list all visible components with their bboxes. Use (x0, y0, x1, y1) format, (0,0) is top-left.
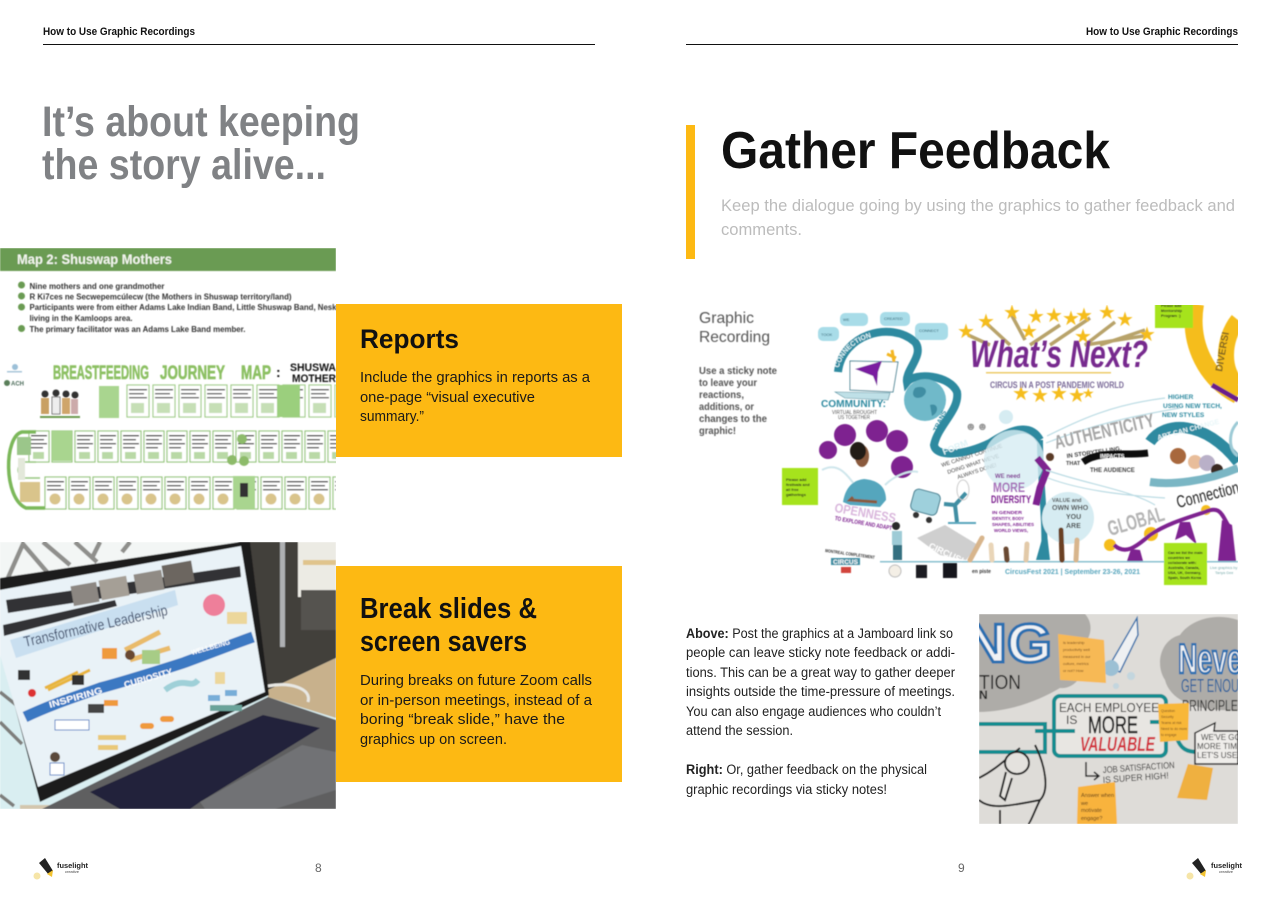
what's next title with stars: CIRCUS IN A POST PANDEMIC WORLD (990, 380, 1124, 390)
left page number: 8 (315, 861, 322, 875)
green sticky note bottom: collaborate with: (1168, 561, 1197, 565)
more diversity text: MORE (993, 479, 1025, 495)
lettering on wall (979, 622, 1238, 712)
green sticky note bottom (1164, 543, 1207, 585)
sketched man (979, 745, 1045, 824)
credit text: Tanya Gee (1215, 571, 1233, 575)
break slides body (360, 672, 593, 748)
authenticity section: NEW STYLES (1162, 412, 1205, 419)
laptop screen drawing: Transformative Leadership (22, 602, 169, 651)
what's next title with stars: ★ (977, 311, 995, 333)
reports body: summary.” (360, 408, 424, 425)
map bullet list: Nine mothers and one grandmother (30, 281, 165, 291)
what's next title with stars: ★ (1116, 309, 1134, 331)
lettering on wall: PRINCIPLE (1182, 698, 1238, 715)
map title: BREASTFEEDING (53, 363, 149, 384)
authenticity section (1046, 394, 1222, 505)
teal box: each employee: IS (1066, 713, 1077, 727)
global connection figures (1104, 478, 1241, 561)
green sticky note bottom: Can we list the main (1168, 551, 1203, 555)
transform ribbon and aerialist: FORM (941, 438, 969, 457)
authenticity section: HIGHER (1168, 394, 1194, 401)
map group of mothers (40, 390, 80, 418)
break slides body: or in-person meetings, instead of a (360, 692, 593, 709)
image: breastfeeding journey map report page (0, 248, 338, 511)
job satisfaction note (1086, 760, 1175, 785)
right footer logo (1186, 858, 1242, 880)
orange sticky notes: Is leadership (1063, 641, 1085, 645)
global connection figures: Connection (1174, 478, 1241, 512)
lettering on wall: GET ENOU (1181, 676, 1239, 696)
orange sticky notes: productivity well (1063, 648, 1090, 652)
left footer logo (34, 858, 88, 880)
speech bubble (1195, 723, 1247, 764)
credit text (1210, 566, 1238, 575)
map journey rows (9, 384, 338, 511)
jamboard instructions: reactions, (699, 389, 744, 401)
connection ribbon and laptop: WE (843, 317, 850, 322)
transform ribbon and aerialist: ☻☻ (965, 421, 988, 433)
what's next title with stars: ★ (1068, 385, 1086, 407)
map header bar: Map 2: Shuswap Mothers (17, 251, 172, 267)
sun arc: diversity: DIVERSI (1214, 331, 1232, 373)
circus fest logos: MONTREAL COMPLETEMENT (825, 548, 875, 560)
green sticky note bottom: countries we (1168, 556, 1190, 560)
what's next title with stars: ★ (957, 321, 975, 343)
authenticity section: USING NEW TECH, (1163, 403, 1222, 410)
right page subtitle: comments. (721, 220, 802, 239)
map bullet list (18, 281, 337, 334)
audience crowd on teal arch (1150, 419, 1238, 483)
break slides body: boring “break slide,” have the (360, 711, 565, 728)
what's next title with stars: ★ (1045, 305, 1063, 327)
laptop screen drawing: WELLBEING (191, 639, 232, 657)
map title: MOTHER (292, 373, 336, 385)
community text (821, 399, 886, 421)
map logos (4, 364, 24, 388)
what's next title with stars: ★ (1031, 385, 1049, 407)
right page number: 9 (958, 861, 965, 875)
be who you are circle: OWN WHO (1052, 505, 1089, 512)
be who you are circle: VALUE and (1052, 498, 1082, 504)
teal box: each employee (979, 696, 1198, 756)
right page text: above and right captions: Above: Post the graphics at a Jamboard link so (686, 626, 953, 641)
man looking up (822, 442, 918, 507)
connection ribbon and laptop (818, 312, 1044, 458)
global connection figures: GLOBAL (1105, 503, 1167, 541)
be who you are circle (1042, 492, 1094, 544)
laptop screen drawing: CURIOSITY (123, 667, 174, 690)
teal box: each employee: VALUABLE (1080, 734, 1155, 756)
what's next title with stars: ★ (1003, 302, 1021, 324)
connection ribbon and laptop: TOOK (821, 332, 833, 337)
what's next title with stars: ★ (1098, 302, 1116, 324)
right page subtitle (721, 196, 1235, 239)
green sticky note left: all free (786, 487, 799, 492)
teal box: each employee: EACH EMPLOYEE (1059, 700, 1159, 715)
what's next title with stars: ★ (1082, 385, 1095, 401)
what's next title with stars: ★ (1020, 321, 1038, 343)
orange sticky notes: culture, metrics (1063, 662, 1089, 666)
right running header: How to Use Graphic Recordings (1086, 26, 1238, 38)
reports heading: Reports (360, 324, 459, 354)
lettering on wall: NG (965, 612, 1052, 674)
what's next title with stars: ★ (1027, 306, 1045, 328)
transform ribbon and aerialist (932, 409, 1054, 560)
globe (904, 379, 946, 421)
laptop screen bezel (0, 542, 269, 802)
reports body: one-page “visual executive (360, 389, 535, 406)
break slides body: graphics up on screen. (360, 731, 507, 748)
what's next title with stars: ★ (1012, 383, 1030, 405)
map title: JOURNEY (160, 363, 225, 384)
right page text: above and right captions: Right: Or, gather feedback on the physical (686, 762, 927, 777)
green sticky note bottom: Australia, Canada, (1168, 566, 1199, 570)
orange sticky notes: Security (1161, 715, 1174, 719)
connection ribbon and laptop: CREATED (884, 316, 903, 321)
rocket (1103, 618, 1138, 689)
left footer logo: fuselight (57, 861, 88, 870)
transform ribbon and aerialist: DOING WHAT WE'VE (947, 453, 1000, 476)
van, dancer and street scene (880, 480, 1238, 566)
more diversity text: SHAPES, ABILITIES (992, 522, 1034, 527)
right page text: above and right captions (686, 626, 955, 797)
right page text: above and right captions: attend the session. (686, 723, 793, 738)
jamboard instructions: graphic! (699, 425, 736, 437)
what's next title with stars: What’s Next? (970, 334, 1148, 376)
speech bubble: MORE TIME (1197, 742, 1242, 751)
orange sticky notes: Question (1161, 709, 1175, 713)
be who you are circle: ARE (1066, 523, 1081, 530)
right page text: above and right captions: insights outside the time-pressure of meetings. (686, 684, 955, 699)
green sticky note left: Please add (786, 477, 807, 482)
green sticky note top: Mentorship (1161, 308, 1183, 313)
right footer logo: creative (1219, 869, 1234, 874)
laptop base and keyboard (42, 697, 336, 809)
green sticky note top: Please add (1161, 303, 1182, 308)
map title: : (276, 364, 281, 380)
right page text: above and right captions: graphic recordings via sticky notes! (686, 782, 887, 797)
circus fest logos: en piste (972, 569, 991, 575)
authenticity section: THAT (1066, 461, 1081, 467)
map title: SHUSWA (290, 362, 336, 374)
orange sticky notes: engage? (1081, 816, 1102, 822)
circus fest logos (825, 548, 991, 578)
more diversity text: WE need (995, 474, 1021, 480)
orange sticky notes: Teams at risk (1161, 721, 1182, 725)
break slides heading (360, 593, 537, 658)
map bullet list: living in the Kamloops area. (30, 313, 132, 323)
more diversity text: IDENTITY, BODY (992, 516, 1024, 521)
map bullet list: Participants were from either Adams Lake Indian Band, Little Shuswap Band, Nesk (30, 302, 337, 312)
break slides heading: screen savers (360, 626, 527, 658)
what's next title with stars: ★ (1074, 326, 1092, 348)
left footer logo: creative (65, 869, 80, 874)
left page title (42, 98, 360, 189)
yellow panel: break slides (336, 566, 622, 782)
yellow accent bar (686, 125, 695, 259)
job satisfaction note: JOB SATISFACTION (1102, 760, 1175, 775)
be who you are circle: YOU (1066, 514, 1081, 521)
what's next title with stars: ★ (1075, 305, 1093, 327)
authenticity section: IMPACTS (1100, 454, 1125, 460)
right page text: above and right captions: people can leave sticky note feedback or addi- (686, 645, 955, 660)
more diversity text (991, 474, 1034, 533)
van, dancer and street scene: CIRCUS! (927, 541, 965, 566)
right page text: above and right captions: tions. This can be a great way to gather deeper (686, 665, 955, 680)
credit text: Live graphics by (1210, 566, 1238, 570)
laptop screen drawing (0, 546, 265, 787)
event line: CircusFest 2021 | September 23-26, 2021 (1005, 567, 1140, 576)
community text: VIRTUAL BROUGHT (832, 410, 877, 416)
jamboard instructions: additions, or (699, 401, 754, 413)
transform ribbon and aerialist: TRANS (932, 409, 949, 433)
green sticky note top: Program :) (1161, 313, 1181, 318)
right page subtitle: Keep the dialogue going by using the graphics to gather feedback and (721, 196, 1235, 215)
more diversity text: WORLD VIEWS, (994, 528, 1028, 533)
speech bubble: WE'VE GOT (1201, 733, 1246, 742)
orange sticky notes: we (1080, 801, 1088, 807)
authenticity section: AUTHENTICITY (1052, 410, 1157, 454)
left page title: It’s about keeping (42, 98, 360, 146)
raised hands (970, 530, 1077, 560)
wall and desk surroundings (0, 542, 336, 809)
speech bubble: LET'S USE IT (1197, 751, 1247, 760)
green sticky note left: festivals and (786, 482, 810, 487)
lettering on wall: Neve (1178, 635, 1242, 682)
jamboard instructions: Recording (699, 329, 770, 346)
what's next title with stars: ★ (1050, 383, 1068, 405)
map bullet list: R Ki7ces ne Secwepemcúlecw (the Mothers in Shuswap territory/land) (30, 292, 292, 302)
community text: US TOGETHER (838, 415, 870, 421)
more diversity text: DIVERSITY (991, 494, 1031, 506)
map bullet list: The primary facilitator was an Adams Lake Band member. (30, 324, 246, 334)
right page text: above and right captions: You can also engage audiences who couldn’t (686, 704, 941, 719)
right footer logo: fuselight (1211, 861, 1242, 870)
authenticity section: THE AUDIENCE (1090, 468, 1135, 474)
jamboard instructions: changes to the (699, 413, 767, 425)
map logos: ACH (11, 382, 24, 388)
laptop screen drawing: INSPIRING (48, 685, 103, 710)
green sticky note left: gatherings (786, 492, 806, 497)
green sticky note bottom: USA, UK, Germany, (1168, 571, 1201, 575)
jamboard instructions: Use a sticky note (699, 365, 777, 377)
yellow panel: reports (336, 304, 622, 457)
orange sticky notes: measured in our (1063, 655, 1091, 659)
orange sticky notes: to engage (1161, 733, 1177, 737)
orange sticky notes: motivate (1081, 808, 1102, 814)
purple idea circles (819, 420, 913, 478)
break slides body: During breaks on future Zoom calls (360, 672, 592, 689)
jamboard instructions (699, 310, 777, 437)
openness lettering: TO EXPLORE AND ADAPT (834, 516, 893, 532)
orange sticky notes: Answer when (1081, 793, 1114, 799)
lettering on wall: TION (979, 672, 1021, 694)
left running header: How to Use Graphic Recordings (43, 26, 195, 38)
wall background (979, 614, 1238, 824)
grey clouds (979, 614, 1238, 712)
connection ribbon and laptop: CONNECTION (834, 332, 872, 368)
sun arc: diversity (1194, 304, 1238, 400)
lettering on wall: N (979, 688, 988, 702)
left page title: the story alive... (42, 141, 326, 189)
openness lettering (834, 503, 896, 530)
map header bar (0, 248, 336, 271)
right page title: Gather Feedback (721, 122, 1110, 180)
green sticky note left (782, 468, 818, 505)
more diversity text: IN GENDER (992, 510, 1023, 515)
green sticky note bottom: Spain, South Korea (1168, 576, 1202, 580)
map title (52, 362, 336, 383)
transform ribbon and aerialist: WE CANNOT CONTINUE (941, 443, 1004, 469)
jamboard instructions: to leave your (699, 377, 757, 389)
connection ribbon and laptop: CONNECT (919, 328, 939, 333)
map title: MAP (241, 363, 271, 384)
audience crowd on teal arch: ART CAN CHANGE (1157, 419, 1220, 442)
authenticity section: IN STORYTELLING, (1066, 446, 1122, 460)
orange sticky notes: Need to do more (1161, 727, 1187, 731)
what's next title with stars (957, 302, 1156, 407)
openness lettering: OPENNESS (833, 500, 897, 526)
jamboard instructions: Graphic (699, 310, 754, 327)
break slides heading: Break slides & (360, 593, 537, 625)
community text: COMMUNITY: (821, 399, 886, 410)
job satisfaction note: IS SUPER HIGH! (1102, 770, 1169, 785)
teal box: each employee: MORE (1088, 712, 1138, 739)
reports body: Include the graphics in reports as a (360, 369, 591, 386)
green sticky note top (1154, 305, 1194, 329)
what's next title with stars: ★ (1138, 324, 1156, 346)
what's next title with stars: ★ (1062, 308, 1080, 330)
image: circus graphic recording on jamboard (698, 305, 1238, 586)
image: physical graphic recording with sticky notes (965, 612, 1247, 824)
orange sticky notes (1058, 634, 1213, 824)
image: laptop showing graphic recording (0, 542, 336, 809)
transform ribbon and aerialist: ALWAYS DONE! (957, 462, 998, 481)
reports body (360, 369, 591, 425)
circus fest logos: CIRCUS (833, 560, 858, 566)
orange sticky notes: or not? How (1063, 669, 1084, 673)
